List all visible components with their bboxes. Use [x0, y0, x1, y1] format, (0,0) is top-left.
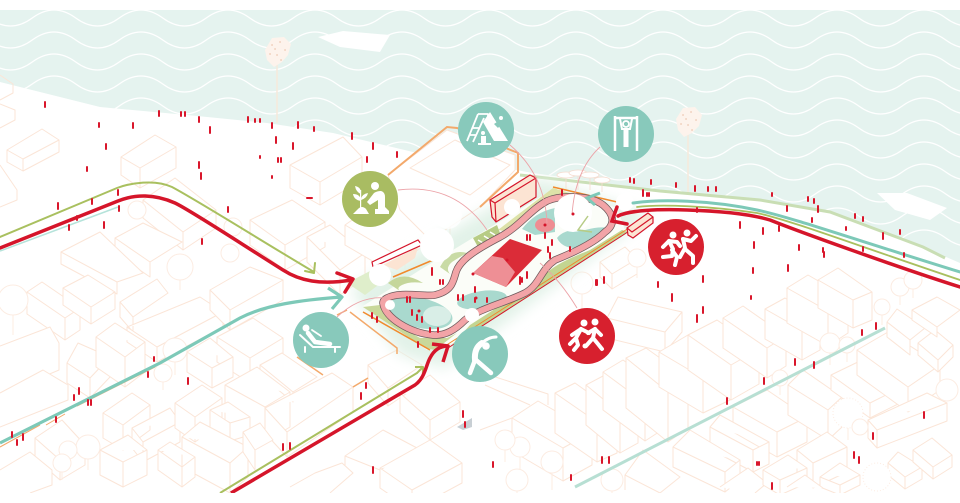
route: left teal under red	[0, 207, 118, 251]
planted strips	[498, 188, 573, 232]
route: upper green	[0, 182, 315, 273]
route: upper red arrow	[0, 196, 353, 292]
boats	[318, 31, 947, 220]
red framed pavilions	[372, 175, 653, 270]
orange street outlines	[0, 127, 518, 447]
icon: pull-up bar	[598, 106, 654, 162]
orange and red edge lines	[363, 187, 617, 350]
ponds	[385, 291, 455, 335]
entrance path	[347, 270, 385, 295]
outlined street trees	[0, 201, 958, 500]
people	[12, 102, 924, 489]
palm trees in water	[265, 37, 702, 195]
icon: playing football	[559, 308, 615, 364]
park glow	[350, 178, 650, 368]
raised loop walkway	[383, 197, 612, 335]
park trees	[369, 193, 634, 322]
route: teal arrow	[0, 288, 342, 443]
connector lines	[337, 145, 600, 317]
park ground	[363, 188, 625, 350]
route: lower green	[220, 367, 423, 493]
teal greenway lower right	[575, 328, 885, 487]
red sports court	[473, 239, 542, 287]
icon: sun lounger	[293, 312, 349, 368]
paved patch	[457, 418, 472, 430]
water with waves	[0, 10, 960, 263]
icon: gardening	[342, 171, 398, 227]
palm cluster by park	[557, 170, 610, 192]
small teal arrow in park	[587, 193, 600, 205]
icon: playground slide	[458, 102, 514, 158]
green chevron in park	[578, 216, 592, 232]
icon: jogging pair	[648, 219, 704, 275]
route: coast road teal green red	[612, 201, 960, 287]
park	[347, 175, 653, 350]
shoreline band	[520, 175, 945, 258]
icon: stretching figure	[452, 326, 508, 382]
route: lower red arrow	[231, 344, 448, 493]
